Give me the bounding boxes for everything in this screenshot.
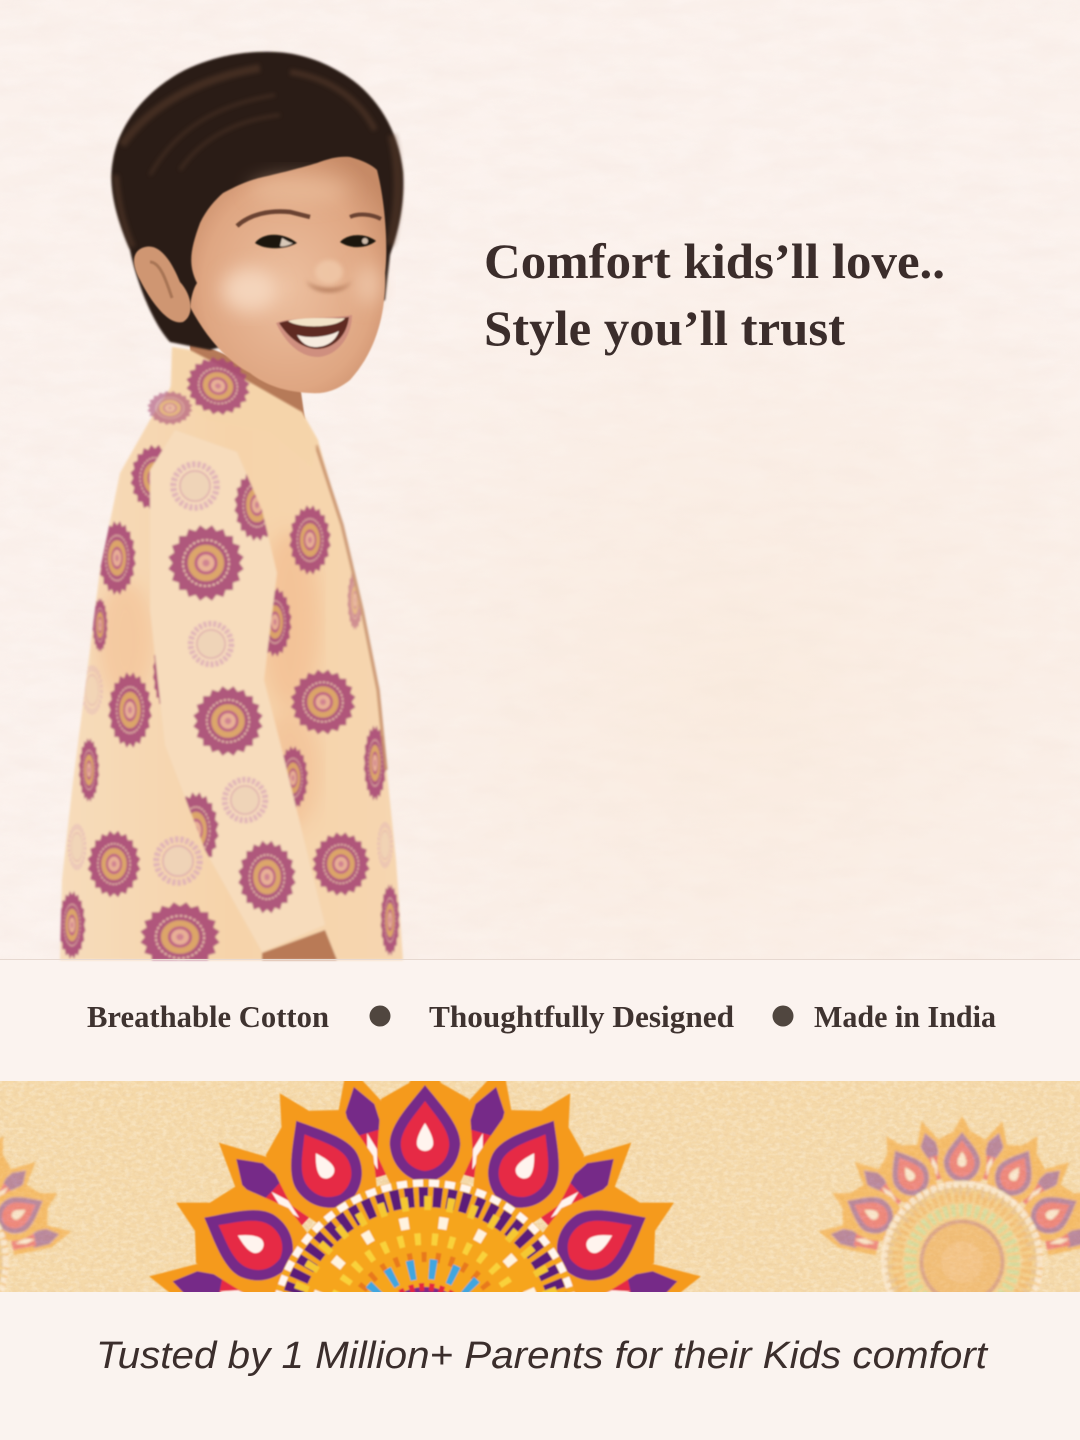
feature strip background (0, 959, 1080, 1081)
boy: placket (316, 445, 386, 770)
heading line 1: Comfort kids’ll love.. (484, 233, 945, 289)
boy: neck (190, 340, 305, 420)
feature: breathable cotton: Breathable Cotton (87, 999, 329, 1034)
boy: torso print motifs (58, 445, 399, 972)
banner: textured background (0, 1081, 1080, 1292)
boy: ear (134, 246, 191, 322)
boy: sleeve print motifs (168, 464, 296, 913)
boy: cheek highlights (222, 176, 380, 312)
boy: collar (170, 347, 318, 468)
feature: made in india: Made in India (814, 999, 996, 1034)
boy: kurta body (58, 347, 403, 972)
banner: main mandala (148, 1081, 702, 1292)
boy: hand at cuff (262, 930, 337, 960)
heading (484, 233, 945, 356)
boy: hair side brown tones (116, 68, 398, 247)
banner: faded right mandala (818, 1115, 1080, 1292)
mandala banner (0, 1081, 1080, 1292)
boy: kurta shading (58, 445, 399, 972)
feature row (87, 999, 996, 1034)
footer strip background (0, 1292, 1080, 1440)
feature: thoughtfully designed: Thoughtfully Designed (429, 999, 734, 1034)
boy: smile (276, 315, 352, 357)
banner: faded left mandala (0, 1136, 72, 1291)
boy: sleeve (150, 430, 325, 952)
boy: head back hair (111, 52, 403, 350)
boy: face (190, 157, 386, 393)
bullet dot 1 (370, 1006, 390, 1026)
photo: smiling boy in printed kurta (58, 52, 403, 972)
heading line 2: Style you’ll trust (484, 300, 845, 356)
divider (0, 959, 1080, 960)
footer tagline: Tusted by 1 Million+ Parents for their Kids comfort (96, 1335, 989, 1377)
boy: nose (306, 260, 352, 292)
boy: eyes and brows (237, 212, 381, 248)
bullet dot 2 (772, 1006, 794, 1026)
